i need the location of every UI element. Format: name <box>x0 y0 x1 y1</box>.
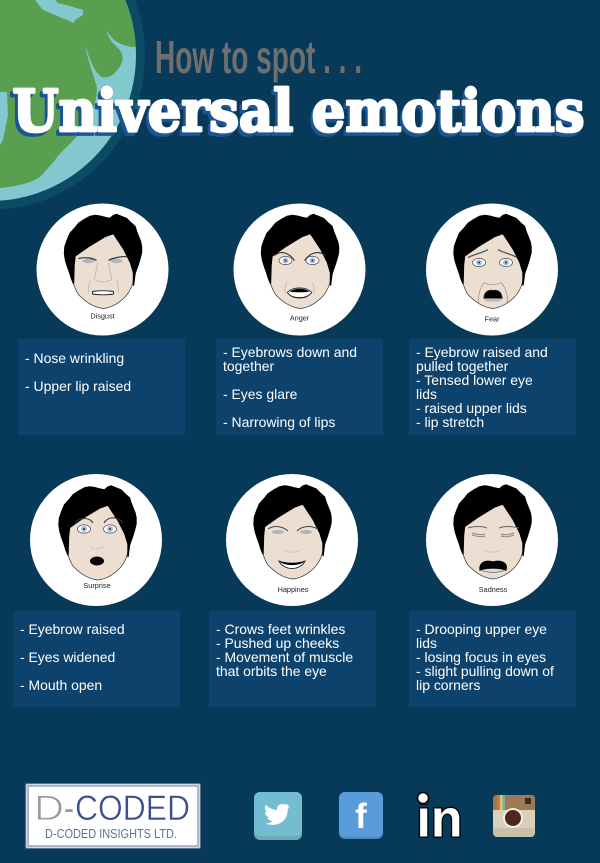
face: happiness: Happines <box>278 585 309 594</box>
panel: anger signs: together <box>223 358 274 374</box>
logo: D-Coded Insights: D-CODED INSIGHTS LTD. <box>45 826 177 841</box>
face: happiness <box>226 474 358 606</box>
face: sadness <box>426 474 558 606</box>
icon: facebook: f <box>355 797 367 836</box>
face: fear <box>426 204 558 336</box>
panel: surprise signs: - Eyebrow raised <box>20 621 125 637</box>
panel: fear signs: - Eyebrow raised and <box>416 344 548 360</box>
logo: D-Coded Insights: - <box>64 789 74 828</box>
logo: D-Coded Insights: D <box>34 789 64 828</box>
icon: facebook <box>339 792 383 839</box>
panel: happiness signs: - Crows feet wrinkles <box>216 621 345 637</box>
panel: anger signs: - Narrowing of lips <box>223 414 335 430</box>
panel: happiness signs: - Pushed up cheeks <box>216 635 339 651</box>
face: disgust: Disgust <box>90 312 115 320</box>
panel: anger signs: - Eyebrows down and <box>223 344 357 360</box>
face: sadness: Sadness <box>479 585 508 594</box>
panel: happiness signs: - Movement of muscle <box>216 649 353 665</box>
panel: disgust signs: - Upper lip raised <box>25 378 131 394</box>
panel: fear signs: lids <box>416 386 437 402</box>
panel: sadness signs: - Drooping upper eye <box>416 621 547 637</box>
panel: sadness signs: lip corners <box>416 677 480 693</box>
panel: disgust signs <box>18 339 185 435</box>
face: anger <box>234 204 366 336</box>
panel: anger signs: - Eyes glare <box>223 386 297 402</box>
panel: surprise signs <box>13 611 180 707</box>
logo: D-Coded Insights: CODED <box>75 789 190 828</box>
panel: disgust signs: - Nose wrinkling <box>25 350 124 366</box>
panel: fear signs: - raised upper lids <box>416 400 527 416</box>
face: fear: Fear <box>484 314 500 324</box>
icon: linkedin: in <box>416 790 462 848</box>
icon: instagram <box>493 795 535 837</box>
face: disgust <box>36 204 168 336</box>
icon: twitter <box>254 792 302 840</box>
panel: anger signs <box>216 339 383 435</box>
panel: fear signs: - Tensed lower eye <box>416 372 533 388</box>
panel: sadness signs: lids <box>416 635 437 651</box>
subtitle: How to spot: How to spot . . . <box>155 31 362 83</box>
face: surprise: Surprise <box>83 581 111 590</box>
logo: D-Coded Insights <box>26 784 200 848</box>
panel: sadness signs <box>409 611 576 707</box>
panel: sadness signs: - slight pulling down of <box>416 663 554 679</box>
globe illustration <box>0 0 150 210</box>
panel: surprise signs: - Mouth open <box>20 677 102 693</box>
panel: surprise signs: - Eyes widened <box>20 649 115 665</box>
face: anger: Anger <box>290 314 310 322</box>
panel: happiness signs: that orbits the eye <box>216 663 327 679</box>
panel: sadness signs: - losing focus in eyes <box>416 649 546 665</box>
face: surprise <box>30 474 162 606</box>
panel: fear signs: - lip stretch <box>416 414 484 430</box>
panel: fear signs: pulled together <box>416 358 508 374</box>
panel: happiness signs <box>209 611 376 707</box>
panel: fear signs <box>409 339 576 435</box>
